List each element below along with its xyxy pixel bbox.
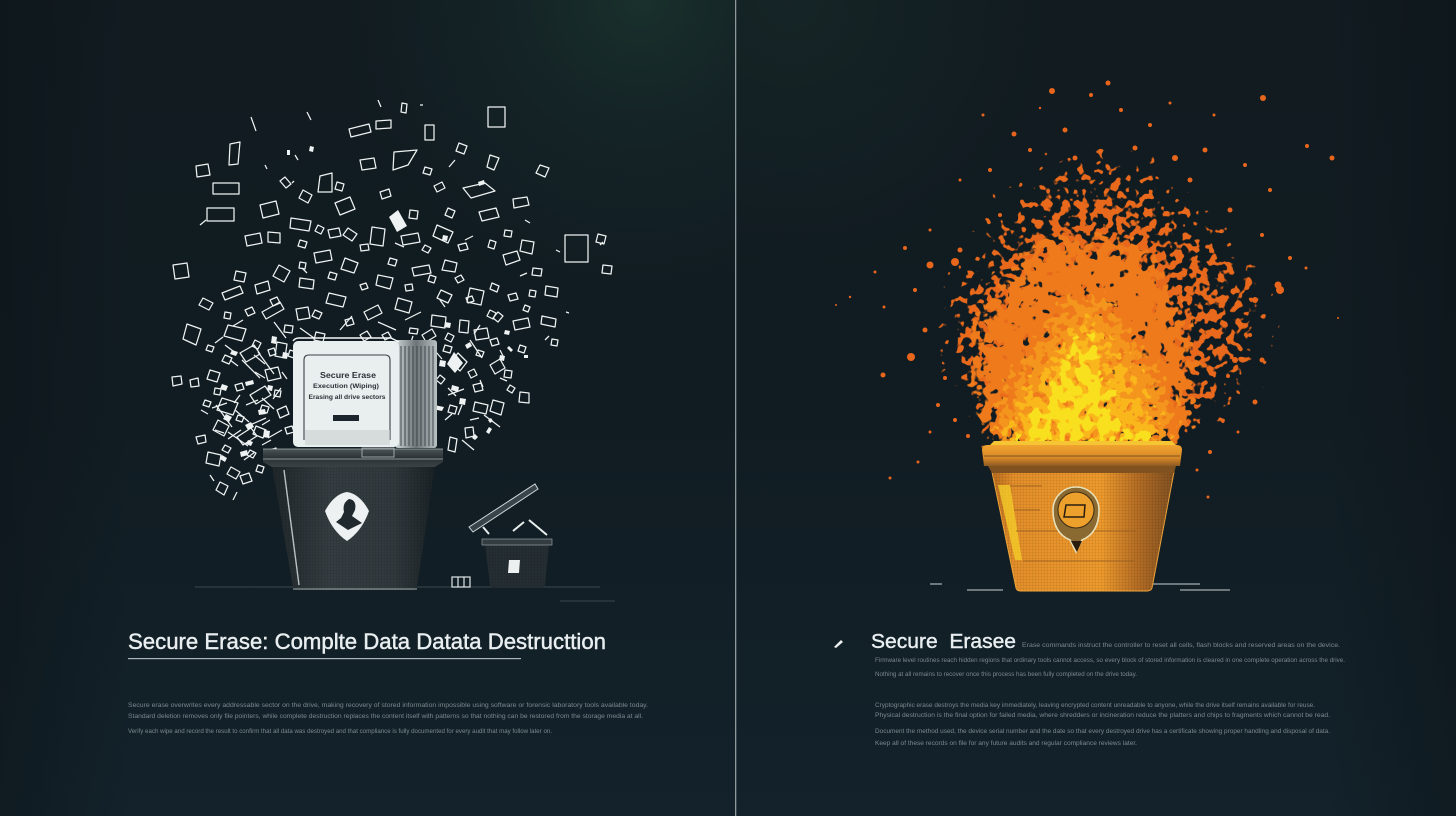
right body text: Physical destruction is the final option for failed media, where shredders or incineration reduce the platters and chips to fragments which cannot be read. [875,712,1330,719]
small box on floor [452,577,470,587]
scattered embers [835,80,1339,498]
left body text [128,702,648,735]
panel: left, paper shredding [172,100,615,601]
right body text: Keep all of these records on file for any future audits and regular compliance reviews later. [875,740,1137,747]
right body text: Firmware level routines reach hidden regions that ordinary tools cannot access, so every block of stored information is cleared in one complete operation across the drive. [875,657,1345,664]
right marker icon [834,640,843,648]
bucket emblem [1053,487,1099,552]
small bin with open lid [452,484,552,588]
storage drive / document in bin [293,338,437,448]
storage drive / document in bin: Erasing all drive sectors [308,395,386,401]
ground shadow lines [195,587,615,601]
bin emblem [325,492,369,541]
solid paper flecks [220,146,528,462]
right body text: Cryptographic erase destroys the media key immediately, leaving encrypted content unreadable to anyone, while the drive itself remains available for reuse. [875,702,1315,709]
right body text [875,642,1345,747]
storage drive / document in bin: Execution (Wiping) [313,383,379,390]
burning bucket [982,441,1182,591]
left body text: Secure erase overwrites every addressable sector on the drive, making recovery of stored information impossible using software or forensic laboratory tools available today. [128,702,648,709]
large bin [263,448,443,590]
right body text: Nothing at all remains to recover once this process has been fully completed on the drive today. [875,671,1137,678]
paper fragments bursting from bin [172,100,612,500]
fire eruption [933,143,1285,455]
panel: right, burning bin [835,80,1339,591]
left body text: Standard deletion removes only file pointers, while complete destruction replaces the content itself with patterns so that nothing can be restored from the storage media at all. [128,713,643,720]
ground lines [930,584,1230,590]
storage drive / document in bin: Secure Erase [320,370,376,380]
panel divider [735,0,736,816]
right title: Secure Erasee [871,631,1016,653]
right body text: Document the method used, the device serial number and the date so that every destroyed drive has a certificate showing proper handling and disposal of data. [875,728,1330,735]
left body text: Verify each wipe and record the result to confirm that all data was destroyed and that compliance is fully documented for every audit that may follow later on. [128,728,552,735]
right body text: Erase commands instruct the controller to reset all cells, flash blocks and reserved areas on the device. [1022,642,1340,649]
left title: Secure Erase: Complte Data Datata Destructtion [128,629,606,654]
